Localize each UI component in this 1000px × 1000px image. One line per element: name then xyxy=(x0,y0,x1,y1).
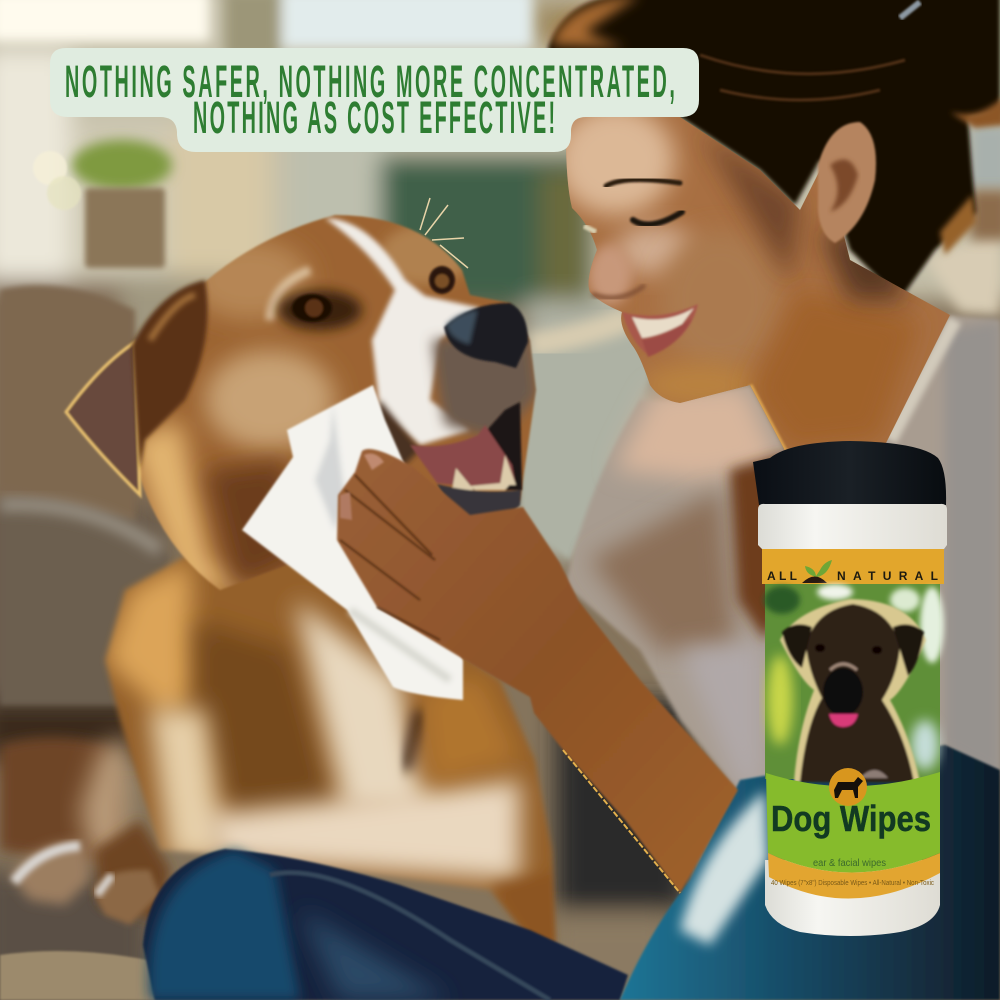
gold arm rim xyxy=(563,750,680,893)
whiskers xyxy=(420,198,468,268)
canister white band xyxy=(758,504,947,549)
dog body xyxy=(102,556,560,942)
right leg xyxy=(620,745,1000,1000)
dog badge xyxy=(829,768,867,806)
sofa and cushions xyxy=(0,125,1000,705)
ear xyxy=(818,122,876,243)
potted plant xyxy=(33,140,172,268)
window panes xyxy=(0,0,532,60)
label photo xyxy=(764,584,944,782)
all natural band: ALL xyxy=(767,569,797,583)
canister lid xyxy=(753,441,946,505)
product: Dog Wipes canister xyxy=(753,441,947,936)
all natural band xyxy=(762,549,944,584)
green panel xyxy=(766,772,940,872)
shirt xyxy=(565,315,1000,790)
woman xyxy=(548,0,1000,790)
wipe xyxy=(242,385,463,700)
nose shadow xyxy=(592,285,645,298)
jeans xyxy=(143,745,1000,1000)
canister body bottom xyxy=(765,860,940,936)
small print: 40 Wipes (7"x8") Disposable Wipes • All-Natural • Non-Toxic xyxy=(771,880,934,887)
face xyxy=(566,117,950,450)
headline text: NOTHING SAFER, NOTHING MORE CONCENTRATED, xyxy=(65,58,675,107)
finger gaps and nails xyxy=(340,475,440,640)
dog xyxy=(0,198,570,960)
dog rear and paws xyxy=(0,735,170,925)
dog mouth xyxy=(410,402,522,524)
label puppy xyxy=(780,599,926,782)
eyebrow and closed eye xyxy=(584,180,682,232)
rug xyxy=(0,951,155,1000)
headline text xyxy=(65,58,675,143)
dog head xyxy=(140,214,538,590)
woman's hand and arm xyxy=(337,449,738,893)
dog nose xyxy=(444,303,528,368)
headline text: NOTHING AS COST EFFECTIVE! xyxy=(193,94,555,143)
left knee xyxy=(143,849,628,1000)
gold bottom band xyxy=(768,853,940,899)
smile xyxy=(622,304,698,357)
dog blaze and muzzle xyxy=(325,218,480,445)
dog eyes xyxy=(292,266,455,322)
all natural band: NATURAL xyxy=(837,569,938,583)
hair xyxy=(548,0,1000,300)
subtitle: ear & facial wipes xyxy=(813,858,886,869)
product name: Dog Wipes xyxy=(771,798,931,839)
skin behind canister xyxy=(730,455,870,640)
headline banner xyxy=(50,48,699,152)
dog ear xyxy=(66,280,208,495)
